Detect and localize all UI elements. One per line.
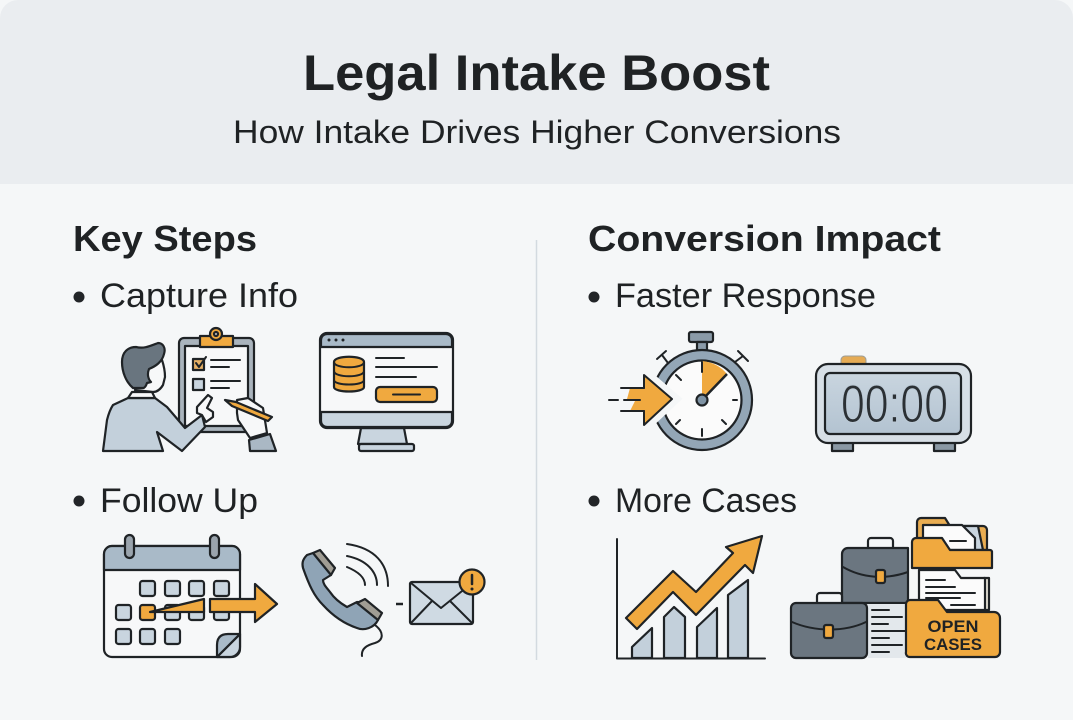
panel: key steps [73,218,484,657]
icon: digital clock: 00:00 [841,375,948,434]
title: Legal Intake Boost [303,45,770,101]
heading: key steps: Key Steps [73,218,257,259]
bullet: faster response: Faster Response [615,277,876,315]
header band [0,0,1073,184]
icon: briefcases and open cases folders: CASES [924,636,982,654]
subtitle: How Intake Drives Higher Conversions [233,114,841,150]
icon: phone handset [302,544,403,656]
icon: computer with database [320,333,453,451]
icon: envelope with alert [410,570,484,624]
bullet: capture info: Capture Info [100,277,298,315]
chart: rising arrow and bars [617,536,765,658]
icon: stopwatch [609,332,752,450]
icon: briefcases and open cases folders: OPEN [928,618,978,636]
icon: calendar with arrow [104,535,277,657]
icon: digital clock [816,356,971,451]
icon: person with clipboard [103,328,276,451]
bullet: follow up: Follow Up [100,482,258,520]
icon: briefcases and open cases folders [791,518,1000,658]
bullet: more cases: More Cases [615,482,797,520]
panel: conversion impact [588,218,1000,658]
heading: conversion impact: Conversion Impact [588,218,941,259]
